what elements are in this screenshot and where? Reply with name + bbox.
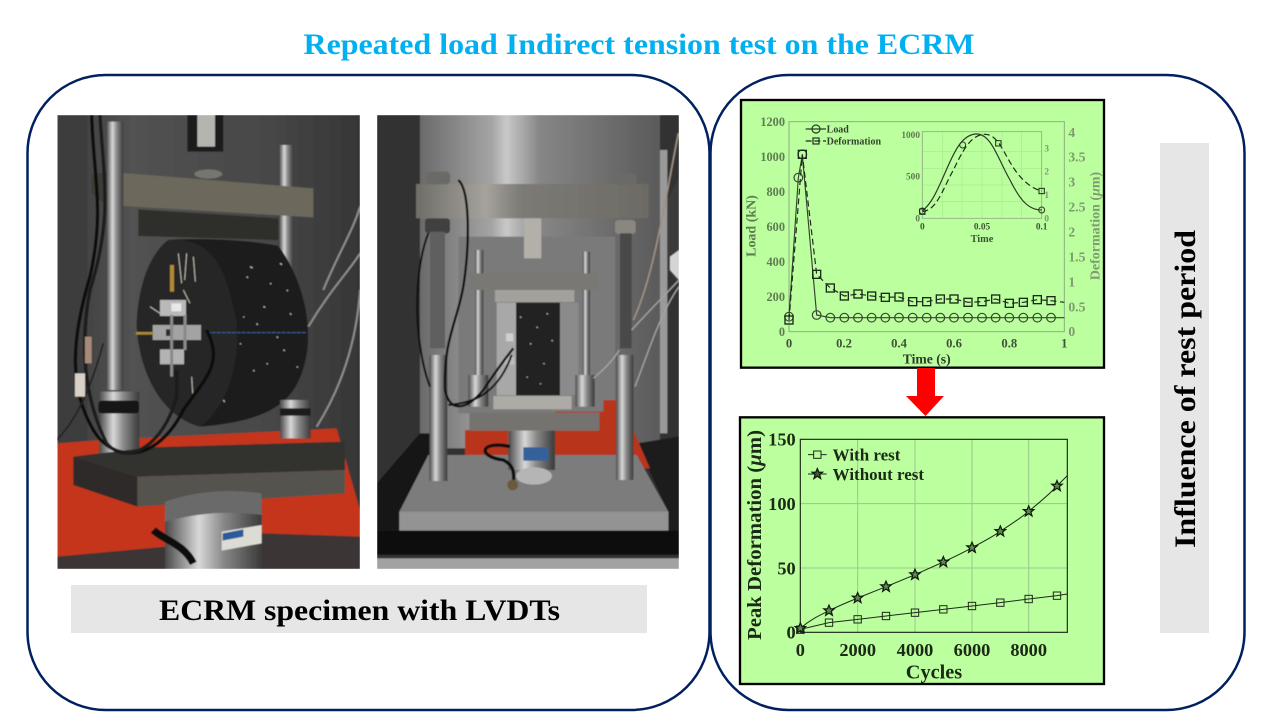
- photo: full test setup: [377, 115, 679, 569]
- right axis labels: 0.5: [1068, 299, 1086, 314]
- x axis labels: 0: [786, 336, 792, 350]
- right axis labels: 0: [1068, 324, 1075, 339]
- right axis labels: [1068, 125, 1103, 339]
- left axis labels: 800: [766, 185, 785, 199]
- legend: Without rest: [833, 465, 924, 484]
- x axis labels: 0.4: [891, 336, 908, 350]
- x axis labels: 0.6: [946, 336, 962, 350]
- inset chart: 0: [920, 223, 925, 233]
- right axis labels: Deformation (μm): [1088, 171, 1103, 280]
- right axis labels: 1.5: [1068, 249, 1086, 264]
- grid: [800, 439, 1067, 632]
- photo: specimen close-up with LVDTs: [57, 115, 360, 569]
- y axis labels: [744, 430, 796, 643]
- right axis labels: 2.5: [1068, 200, 1086, 215]
- right axis labels: 3: [1068, 175, 1075, 190]
- series: without rest: [795, 476, 1067, 633]
- left axis labels: 600: [766, 220, 785, 234]
- x axis labels: 6000: [954, 640, 990, 660]
- inset chart: 500: [906, 173, 920, 183]
- left axis labels: Load (kN): [744, 195, 759, 257]
- side label: Influence of rest period: Influence of rest period: [1169, 230, 1202, 548]
- legend: Load: [827, 124, 849, 135]
- inset chart: 0: [915, 214, 920, 224]
- legend: With rest: [833, 446, 901, 465]
- inset chart: Time: [971, 234, 994, 245]
- inset chart: 0.1: [1036, 223, 1048, 233]
- panel outline: left: [28, 75, 710, 710]
- chart: load and deformation vs time: [741, 100, 1104, 368]
- left axis labels: 1200: [760, 115, 785, 129]
- inset chart: [901, 131, 1049, 245]
- inset chart: 1000: [901, 131, 920, 141]
- right axis labels: 1: [1068, 274, 1075, 289]
- x axis labels: 0.8: [1001, 336, 1017, 350]
- inset chart: 0: [1044, 214, 1049, 224]
- caption: ECRM specimen with LVDTs: [71, 585, 647, 633]
- plot frame: [789, 122, 1064, 332]
- right axis labels: 4: [1068, 125, 1075, 140]
- inset chart: 0.05: [974, 223, 990, 233]
- plot frame: [800, 439, 1067, 632]
- y axis labels: 50: [777, 558, 796, 578]
- left axis labels: 400: [766, 255, 785, 269]
- y axis labels: 0: [786, 623, 796, 643]
- title: Repeated load Indirect tension test on the ECRM: [304, 28, 974, 61]
- chart: peak deformation vs cycles: [740, 417, 1104, 684]
- legend: [808, 446, 924, 484]
- inset chart: 1: [1044, 191, 1049, 201]
- panel: rest period: [710, 75, 1244, 710]
- right axis labels: 2: [1068, 224, 1075, 239]
- right axis labels: 3.5: [1068, 150, 1086, 165]
- x axis labels: 2000: [839, 640, 876, 660]
- caption: ECRM specimen with LVDTs: ECRM specimen with LVDTs: [159, 594, 560, 627]
- load series: [785, 150, 1064, 322]
- left axis labels: 200: [766, 290, 785, 304]
- legend: Deformation: [827, 136, 881, 147]
- panel outline: right: [710, 75, 1244, 710]
- inset chart: 3: [1044, 144, 1049, 154]
- y axis labels: 100: [768, 494, 796, 514]
- x axis labels: 1: [1061, 336, 1067, 350]
- inset chart: 2: [1044, 168, 1049, 178]
- x axis labels: 4000: [897, 640, 933, 660]
- left axis labels: 0: [779, 325, 785, 339]
- x axis labels: [796, 640, 1047, 684]
- x axis labels: 0.2: [836, 336, 852, 350]
- y axis labels: Peak Deformation (μm): [744, 430, 766, 640]
- y axis labels: 150: [768, 430, 796, 450]
- legend: [806, 124, 881, 147]
- x axis labels: 8000: [1010, 640, 1047, 660]
- side label: Influence of rest period: [1160, 143, 1209, 633]
- x axis labels: 0: [796, 640, 805, 660]
- left axis labels: 1000: [760, 150, 785, 164]
- arrow: red down arrow: [906, 368, 944, 416]
- x axis labels: Cycles: [906, 662, 962, 684]
- left axis labels: [744, 115, 785, 339]
- x axis labels: Time (s): [903, 351, 951, 367]
- series: with rest: [797, 592, 1067, 633]
- x axis labels: [786, 336, 1067, 367]
- panel: ECRM specimen: [28, 75, 710, 710]
- deformation series: [785, 150, 1064, 324]
